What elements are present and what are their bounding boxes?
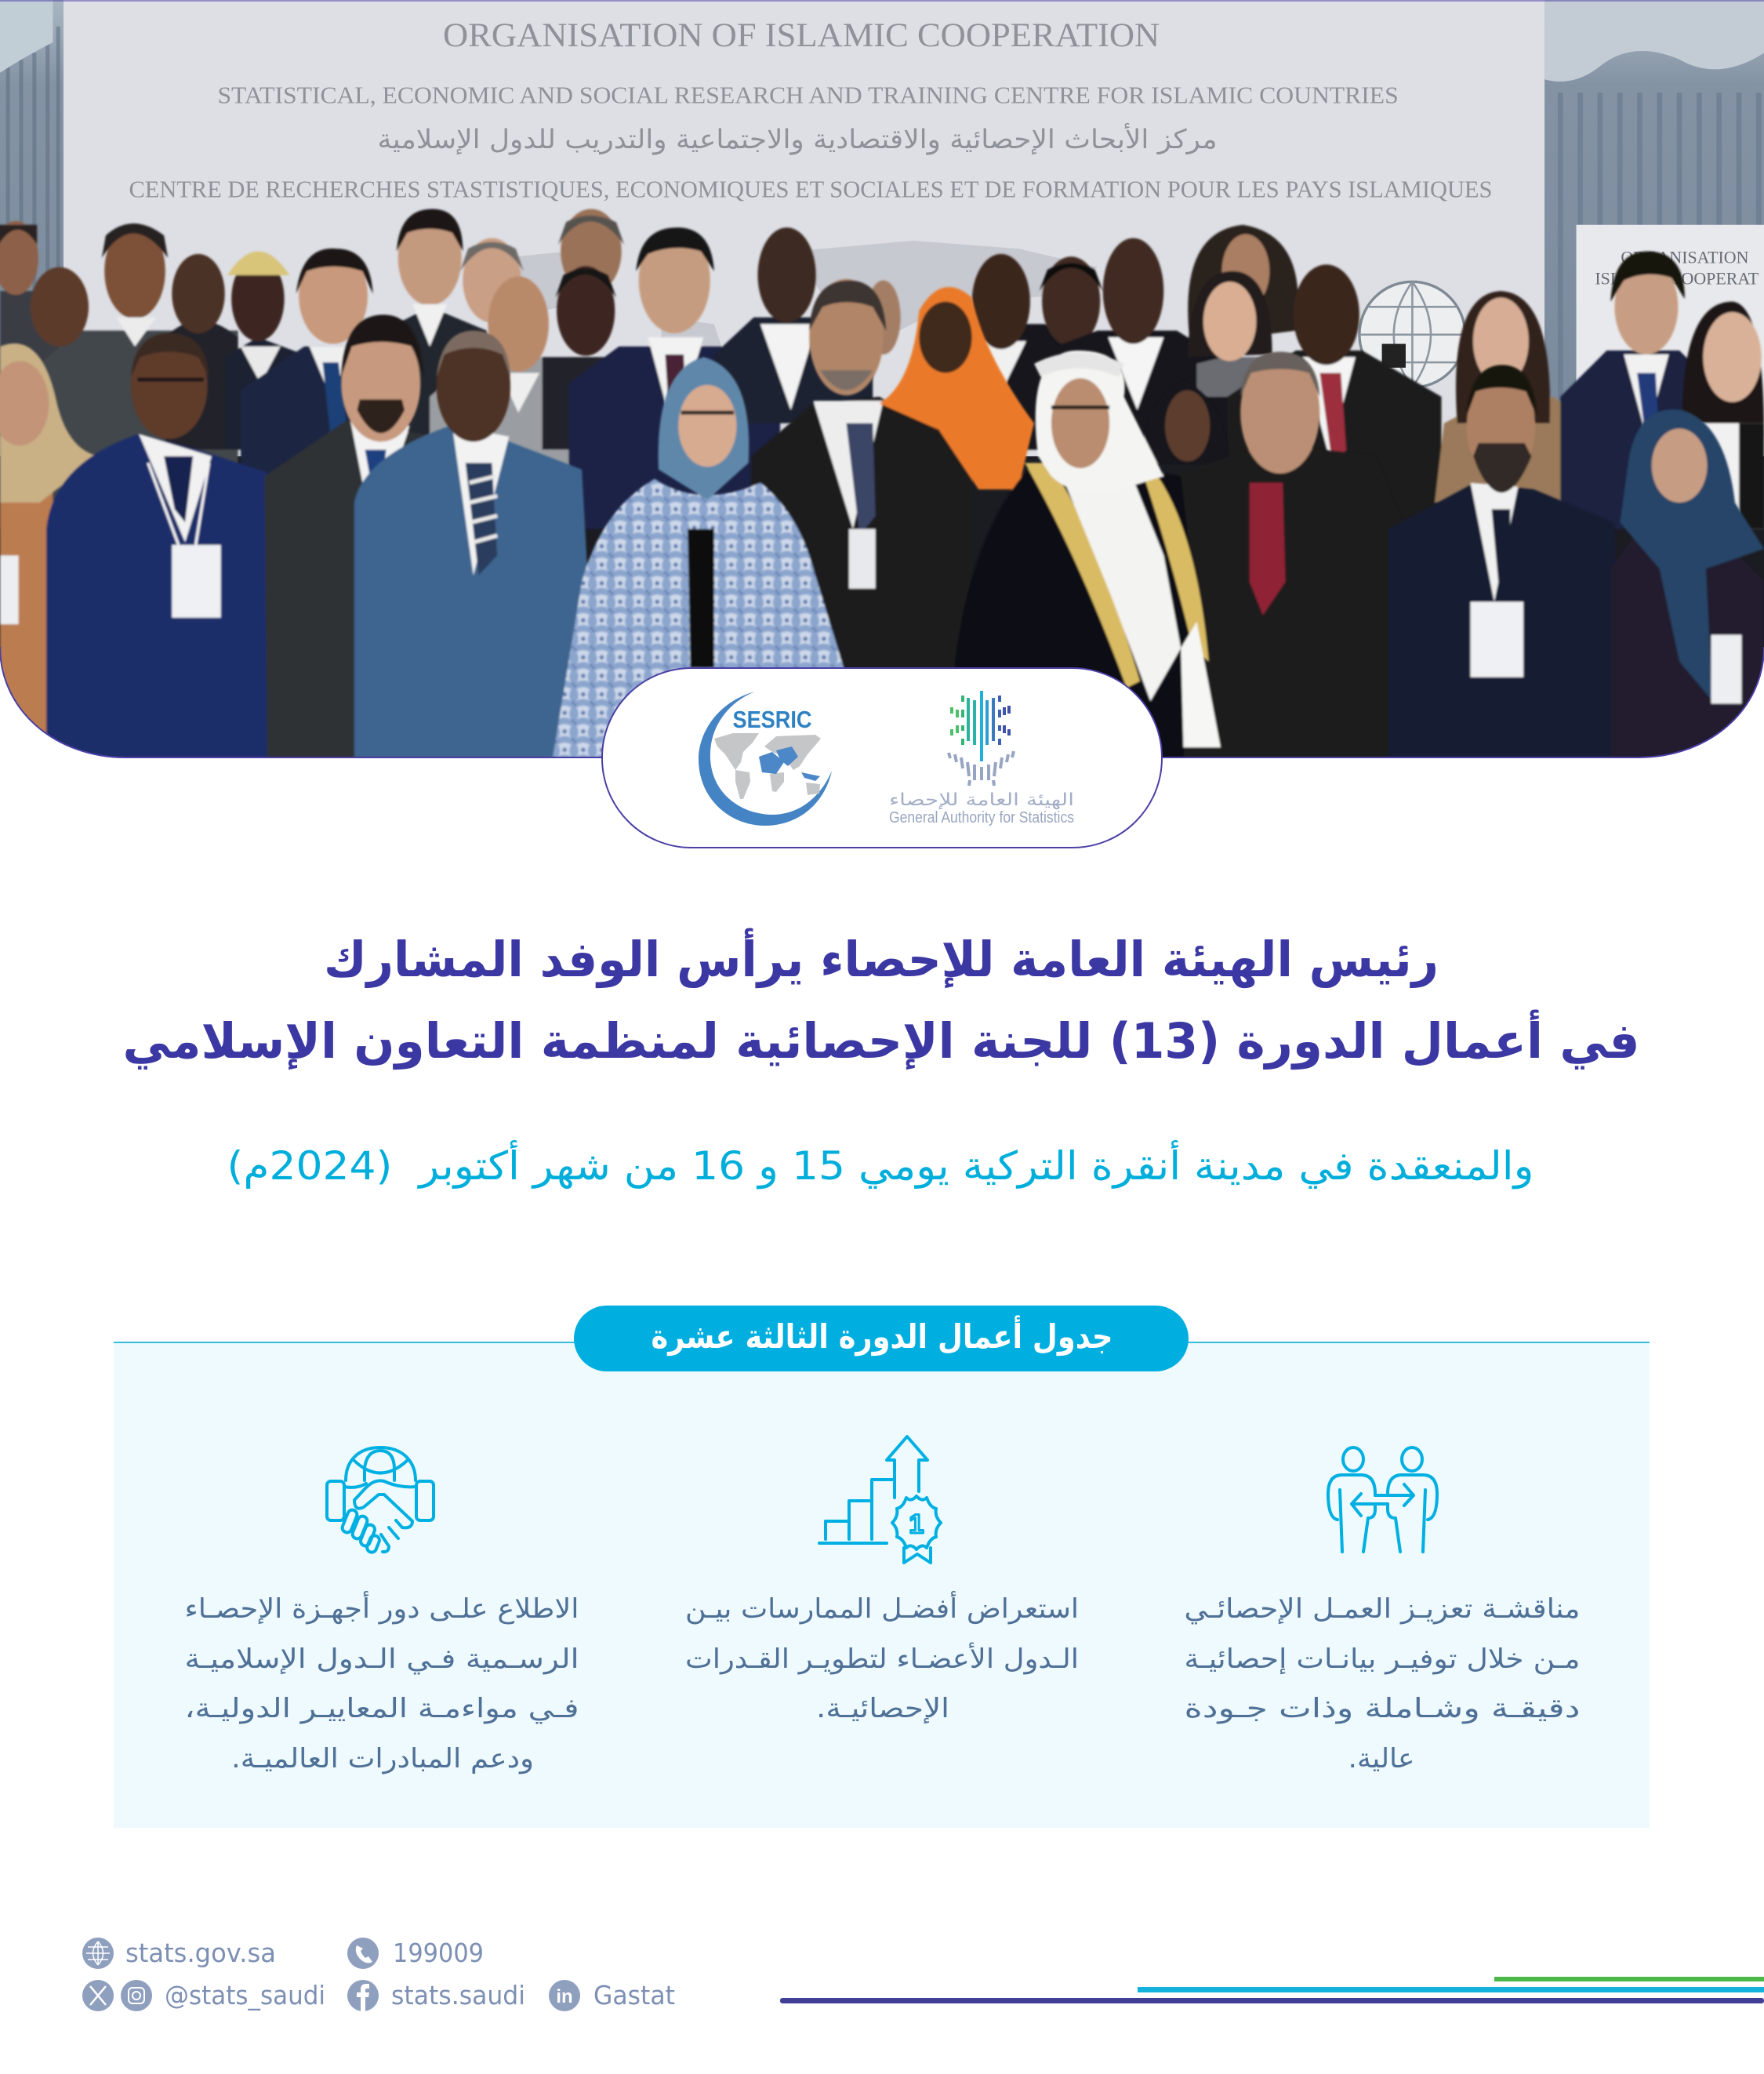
text block: left: فـي مواءمـة المعاييـر الدوليـة،	[185, 1693, 579, 1724]
icon: X	[82, 1980, 114, 2011]
text block: right: دقيقـة وشـاملة وذات جـودة	[1184, 1693, 1581, 1724]
section heading pill	[574, 1306, 1189, 1371]
icon: phone	[347, 1938, 379, 1969]
text block: right	[1184, 1593, 1581, 1774]
text block: left: الاطلاع علـى دور أجهـزة الإحصـاء	[185, 1591, 579, 1625]
subtitle: والمنعقدة في مدينة أنقرة التركية يومي 15 و 16 من شهر أكتوبر (2024م)	[227, 1140, 1534, 1190]
text block: middle	[685, 1591, 1079, 1724]
icon: instagram	[121, 1980, 152, 2011]
decorative coloured bars	[780, 1977, 1764, 2003]
photo: group of delegates in front of backdrop	[0, 0, 1764, 767]
text block: left	[185, 1591, 579, 1774]
backdrop banner with text: ORGANISATION OF ISLAMIC COOPERATION	[443, 16, 1160, 54]
icon: linkedin	[549, 1980, 580, 2011]
side banner and globe	[1359, 225, 1764, 463]
text block: middle: استعراض أفضـل الممارسات بيـن	[685, 1591, 1079, 1625]
footer contacts: stats.gov.sa	[125, 1938, 276, 1968]
icon: rising steps with medal: 1	[909, 1509, 924, 1539]
text block: right: عالية.	[1348, 1743, 1414, 1774]
icon: rising steps with medal	[819, 1437, 941, 1563]
backdrop banner with text: STATISTICAL, ECONOMIC AND SOCIAL RESEARCH AND TRAINING CENTRE FOR ISLAMIC COUNTRIES	[217, 82, 1399, 109]
GASTAT logo	[889, 691, 1074, 826]
side banner and globe: ORGANISATION	[1621, 248, 1749, 267]
backdrop banner with text	[64, 0, 1544, 476]
right curtain	[1541, 0, 1764, 423]
footer contacts: stats.saudi	[391, 1980, 525, 2010]
footer contacts	[82, 1938, 675, 2011]
front row delegates	[0, 279, 1764, 757]
text block: right: مـن خلال توفيـر بيانـات إحصائيـة	[1184, 1644, 1581, 1675]
left curtain	[0, 0, 64, 373]
GASTAT logo: General Authority for Statistics	[889, 809, 1074, 826]
SESRIC logo	[699, 692, 832, 826]
icon: facebook	[347, 1980, 379, 2011]
crowd base	[0, 456, 1764, 767]
icon: two people exchanging	[1328, 1447, 1437, 1552]
backdrop banner with text: CENTRE DE RECHERCHES STASTISTIQUES, ECONOMIQUES ET SOCIALES ET DE FORMATION POUR LES PAYS ISLAMIQUES	[129, 176, 1492, 202]
SESRIC logo: SESRIC	[732, 706, 812, 733]
footer contacts: @stats_saudi	[165, 1980, 325, 2010]
text block: middle: الإحصائيـة.	[816, 1693, 949, 1724]
title	[122, 928, 1640, 1070]
title: رئيس الهيئة العامة للإحصاء يرأس الوفد المشارك	[324, 928, 1439, 988]
back row delegates	[0, 209, 1764, 529]
icon: linkedin: in	[556, 1986, 573, 2007]
icon: handshake and globe	[327, 1447, 434, 1553]
footer contacts: 199009	[393, 1938, 484, 1968]
GASTAT logo: الهيئة العامة للإحصاء	[889, 790, 1074, 810]
panel: agenda	[114, 1306, 1650, 1828]
side banner and globe: ISLAMIC COOPERAT	[1595, 269, 1759, 289]
text block: middle: الـدول الأعضـاء لتطويـر القـدرات	[685, 1642, 1079, 1675]
section heading pill: جدول أعمال الدورة الثالثة عشرة	[651, 1315, 1113, 1357]
backdrop banner with text: مركز الأبحاث الإحصائية والاقتصادية والاجتماعية والتدريب للدول الإسلامية	[378, 122, 1218, 155]
text block: left: الرسـمية فـي الـدول الإسلاميـة	[185, 1644, 579, 1675]
footer contacts: Gastat	[593, 1980, 675, 2010]
title: في أعمال الدورة (13) للجنة الإحصائية لمنظمة التعاون الإسلامي	[122, 1009, 1640, 1070]
text block: right: مناقشـة تعزيـز العمـل الإحصائـي	[1184, 1593, 1581, 1625]
icon: globe	[82, 1938, 114, 1969]
text block: left: ودعم المبادرات العالميـة.	[231, 1743, 534, 1774]
logo pill	[602, 668, 1162, 848]
